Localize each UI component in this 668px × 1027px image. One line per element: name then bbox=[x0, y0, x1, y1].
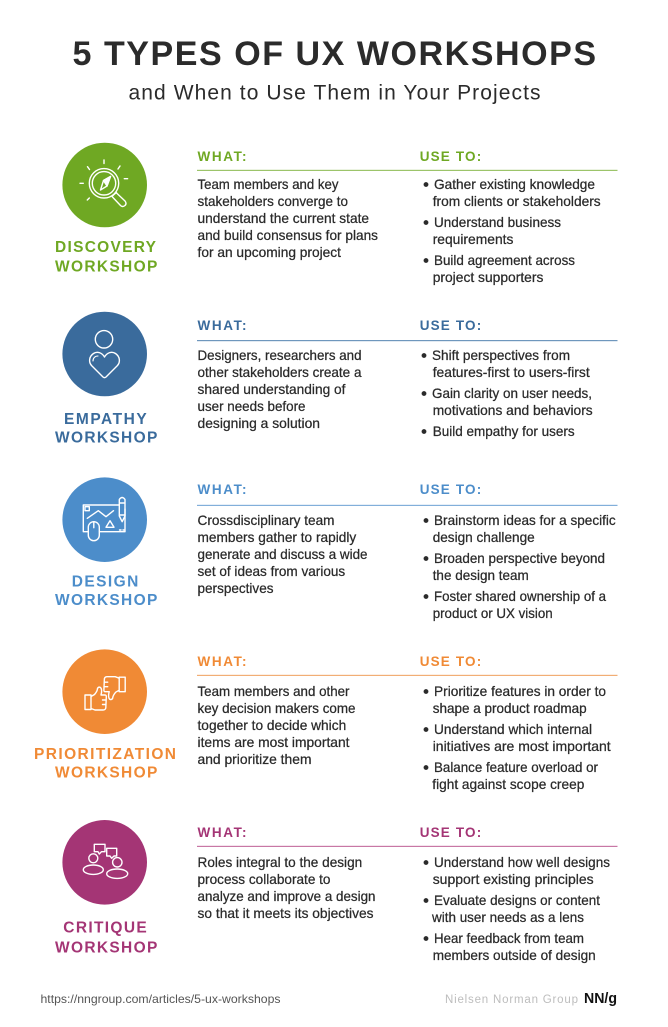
panel: prioritization workshop bbox=[34, 649, 618, 792]
panel: critique workshop bbox=[55, 820, 618, 963]
subtitle: and When to Use Them in Your Projects bbox=[128, 82, 540, 104]
text block: what description: shared understanding of bbox=[198, 381, 346, 397]
list: use to items bbox=[422, 347, 593, 439]
list: use to items: Understand how well designs bbox=[434, 854, 610, 870]
panel: design workshop bbox=[55, 477, 618, 621]
list: use to items: Balance feature overload or bbox=[434, 759, 598, 775]
list: use to items: Broaden perspective beyond bbox=[434, 550, 605, 566]
list: use to items: requirements bbox=[433, 231, 513, 247]
label: critique workshop: WORKSHOP bbox=[55, 940, 157, 957]
label: critique workshop bbox=[55, 920, 157, 957]
text block: what description: Roles integral to the design bbox=[198, 854, 362, 870]
list: use to items: Prioritize features in order to bbox=[434, 683, 606, 699]
text block: what description: Team members and key bbox=[198, 176, 338, 192]
list: use to items bbox=[424, 176, 601, 285]
heading: what: WHAT: bbox=[198, 318, 246, 333]
list: use to items: Foster shared ownership of a bbox=[434, 588, 606, 604]
list: use to items: Understand which internal bbox=[434, 721, 592, 737]
list: use to items: members outside of design bbox=[433, 947, 596, 963]
text block: what description: and build consensus for plans bbox=[198, 227, 378, 243]
footer: NN/g logo: NN/g bbox=[584, 990, 617, 1007]
text block: what description: together to decide which bbox=[198, 717, 346, 733]
text block: what description: designing a solution bbox=[198, 415, 320, 431]
text block: what description: so that it meets its objectives bbox=[198, 905, 374, 921]
heading: what: WHAT: bbox=[198, 825, 246, 840]
icon: two people with speech bubbles bbox=[62, 820, 147, 905]
list: use to items: Build empathy for users bbox=[433, 423, 575, 439]
divider line bbox=[197, 675, 618, 676]
text block: what description: Team members and other bbox=[198, 683, 350, 699]
list: use to items bbox=[424, 512, 616, 621]
heading: what: WHAT: bbox=[198, 149, 246, 164]
text block: what description: and prioritize them bbox=[198, 751, 312, 767]
label: critique workshop: CRITIQUE bbox=[63, 920, 147, 937]
icon: thumbs up and thumbs down bbox=[62, 649, 147, 734]
text block: what description bbox=[198, 176, 378, 260]
text block: what description: user needs before bbox=[198, 398, 306, 414]
text block: what description: for an upcoming project bbox=[198, 244, 341, 260]
list: use to items: initiatives are most important bbox=[433, 738, 611, 754]
list: use to items: the design team bbox=[433, 567, 529, 583]
label: empathy workshop bbox=[55, 411, 157, 447]
text block: what description: set of ideas from various bbox=[198, 563, 345, 579]
heading: use to: USE TO: bbox=[420, 482, 481, 497]
list: use to items: Evaluate designs or content bbox=[434, 892, 600, 908]
text block: what description: key decision makers come bbox=[198, 700, 356, 716]
heading: use to: USE TO: bbox=[420, 318, 481, 333]
list: use to items bbox=[424, 854, 610, 963]
list: use to items: Brainstorm ideas for a specific bbox=[434, 512, 616, 528]
footer: company name: Nielsen Norman Group bbox=[445, 994, 578, 1006]
label: design workshop: WORKSHOP bbox=[55, 592, 157, 609]
heading: what: WHAT: bbox=[198, 482, 246, 497]
text block: what description: Crossdisciplinary team bbox=[198, 512, 334, 528]
text block: what description: generate and discuss a wide bbox=[198, 546, 368, 562]
divider line bbox=[197, 505, 618, 506]
label: prioritization workshop bbox=[34, 746, 176, 782]
label: prioritization workshop: WORKSHOP bbox=[55, 765, 157, 782]
text block: what description: understand the current state bbox=[198, 210, 369, 226]
icon: empathy person with heart bbox=[62, 312, 147, 396]
footer: source url: https://nngroup.com/articles/5-ux-workshops bbox=[40, 992, 280, 1006]
text block: what description: other stakeholders create a bbox=[198, 364, 362, 380]
text block: what description: items are most important bbox=[198, 734, 350, 750]
list: use to items: design challenge bbox=[433, 529, 535, 545]
divider line bbox=[197, 846, 618, 847]
divider line bbox=[197, 340, 618, 341]
label: empathy workshop: EMPATHY bbox=[64, 411, 147, 428]
label: discovery workshop: WORKSHOP bbox=[55, 259, 157, 276]
list: use to items: features-first to users-first bbox=[433, 364, 590, 380]
list: use to items: motivations and behaviors bbox=[433, 402, 593, 418]
list: use to items: with user needs as a lens bbox=[431, 909, 584, 925]
panel: discovery workshop bbox=[55, 143, 618, 285]
icon: discovery magnifier with compass bbox=[62, 143, 147, 227]
list: use to items: Build agreement across bbox=[434, 252, 575, 268]
text block: what description bbox=[198, 347, 362, 431]
heading: use to: USE TO: bbox=[420, 149, 481, 164]
heading: use to: USE TO: bbox=[420, 825, 481, 840]
text block: what description: stakeholders converge to bbox=[198, 193, 348, 209]
list: use to items: from clients or stakeholders bbox=[433, 193, 601, 209]
label: discovery workshop: DISCOVERY bbox=[55, 239, 157, 256]
icon: design canvas with pencil and mouse bbox=[62, 477, 147, 562]
text block: what description: Designers, researchers and bbox=[198, 347, 362, 363]
list: use to items: product or UX vision bbox=[433, 605, 553, 621]
label: discovery workshop bbox=[55, 239, 157, 276]
text block: what description: analyze and improve a design bbox=[198, 888, 376, 904]
list: use to items: Gather existing knowledge bbox=[434, 176, 595, 192]
list: use to items: shape a product roadmap bbox=[433, 700, 587, 716]
text block: what description: perspectives bbox=[198, 580, 274, 596]
text block: what description bbox=[198, 854, 376, 921]
label: design workshop bbox=[55, 574, 157, 609]
title: 5 TYPES OF UX WORKSHOPS bbox=[72, 35, 596, 73]
label: empathy workshop: WORKSHOP bbox=[55, 430, 157, 447]
text block: what description bbox=[198, 512, 368, 596]
list: use to items: Hear feedback from team bbox=[434, 930, 584, 946]
list: use to items: Gain clarity on user needs, bbox=[432, 385, 592, 401]
list: use to items: Understand business bbox=[434, 214, 561, 230]
text block: what description: process collaborate to bbox=[198, 871, 331, 887]
panel: empathy workshop bbox=[55, 312, 618, 447]
label: prioritization workshop: PRIORITIZATION bbox=[34, 746, 176, 763]
text block: what description: members gather to rapidly bbox=[198, 529, 356, 545]
divider line bbox=[197, 170, 618, 171]
list: use to items: fight against scope creep bbox=[432, 776, 585, 792]
heading: what: WHAT: bbox=[198, 654, 246, 669]
list: use to items: project supporters bbox=[433, 269, 543, 285]
text block: what description bbox=[198, 683, 356, 767]
list: use to items bbox=[424, 683, 611, 792]
list: use to items: Shift perspectives from bbox=[432, 347, 570, 363]
label: design workshop: DESIGN bbox=[72, 574, 138, 591]
heading: use to: USE TO: bbox=[420, 654, 481, 669]
list: use to items: support existing principles bbox=[433, 871, 594, 887]
